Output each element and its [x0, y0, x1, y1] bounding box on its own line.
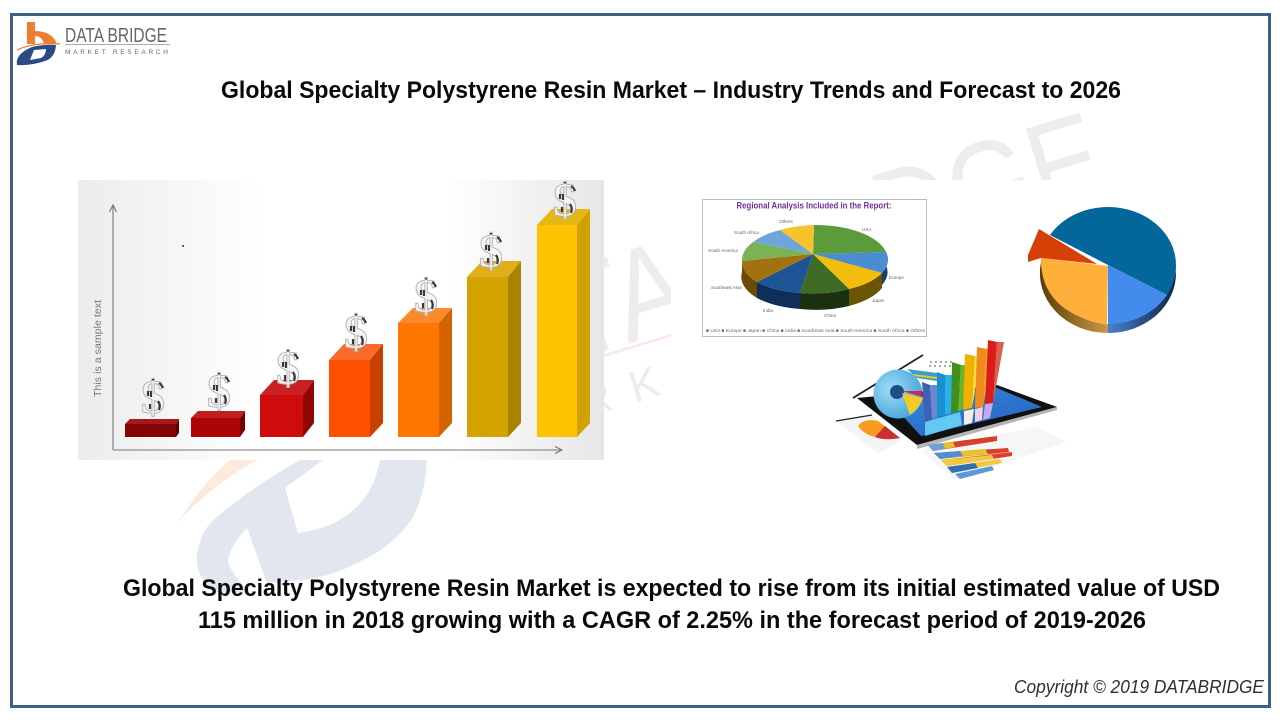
summary line 1: Global Specialty Polystyrene Resin Market is expected to rise from its initial estimated value of USD: [123, 575, 1220, 602]
watermark: brand logo: [178, 460, 427, 592]
bars: front and side faces: [922, 382, 932, 422]
back paper edge: [853, 355, 923, 398]
slice labels: Others: [779, 219, 793, 224]
bar reflection: [925, 412, 962, 436]
bar chart with dollar signs: [78, 174, 604, 460]
illustration: tablet with charts: [836, 340, 1067, 480]
bar rows: [928, 436, 997, 451]
orange slice: [1041, 258, 1108, 325]
icon: blue swoosh: [17, 45, 56, 65]
summary line 2: 115 million in 2018 growing with a CAGR of 2.25% in the forecast period of 2019-2026: [198, 607, 1146, 634]
slice labels: USA: [862, 227, 872, 232]
logo: Data Bridge Market Research: [17, 22, 170, 65]
y axis: [110, 205, 116, 450]
bar 3: $: [276, 342, 300, 395]
bar 4: [329, 306, 383, 437]
slice labels: Japan: [872, 298, 885, 303]
stripes behind bars: [907, 369, 937, 381]
bar 4: $: [344, 306, 368, 359]
pie wall: [1040, 258, 1108, 333]
watermark: brand text: RK: [574, 351, 685, 428]
pie side walls: [741, 252, 888, 310]
tagline: MARKET RESEARCH: [65, 49, 168, 56]
bar 3: [260, 342, 314, 437]
copyright: Copyright © 2019 DATABRIDGE: [1014, 677, 1265, 697]
panel border: [702, 200, 926, 336]
summary text: [123, 575, 1220, 634]
tablet screen: [888, 388, 1042, 436]
3D bars on tablet: [907, 340, 1004, 436]
pie chart 3D: [1028, 207, 1176, 333]
bar 6: [467, 225, 521, 437]
bar 2: [191, 365, 245, 437]
white image backdrop on the right: [671, 180, 1269, 510]
slice labels: Southeast Asia: [711, 285, 742, 290]
slice labels: India: [763, 308, 773, 313]
title: Global Specialty Polystyrene Resin Market – Industry Trends and Forecast to 2026: [221, 77, 1121, 104]
bar 7: [537, 174, 590, 437]
panel: regional analysis pie chart: [702, 200, 926, 336]
icon: orange b: [27, 22, 57, 44]
chart background: [78, 180, 604, 460]
chart title: Regional Analysis Included in the Report:: [736, 200, 892, 210]
slice labels: China: [824, 313, 836, 318]
slice labels: Europe: [889, 275, 904, 280]
dark blue slice: [1050, 207, 1176, 295]
tablet body: [857, 385, 1057, 445]
left paper: [836, 415, 903, 453]
bar 2: $: [207, 365, 231, 418]
slice labels: [708, 219, 904, 318]
bar 6: $: [479, 225, 503, 278]
bar 1: $: [141, 371, 165, 424]
bar 1: [125, 371, 179, 437]
light blue slice: [1108, 265, 1167, 324]
glossy pie disc: [874, 370, 923, 418]
red exploded slice: [1028, 229, 1097, 264]
bar 5: $: [414, 270, 438, 323]
x axis: [113, 446, 562, 454]
slice labels: South Africa: [734, 230, 759, 235]
slice labels: South America: [708, 248, 738, 253]
wordmark: DATA BRIDGE: [65, 25, 167, 47]
watermark: brand text: DATA BRIDGE: [403, 83, 1120, 429]
legend: ■ USA ■ Europe ■ Japan ■ China ■ India ■ Southeast Asia ■ South America ■ South Africa ■ Others: [706, 328, 926, 334]
bar 7: $: [553, 174, 577, 227]
small legend marks: [929, 362, 952, 366]
pie slices: [742, 225, 888, 294]
axis label: This is a sample text: [92, 300, 104, 397]
right paper: [920, 427, 1067, 480]
bar 5: [398, 270, 452, 437]
